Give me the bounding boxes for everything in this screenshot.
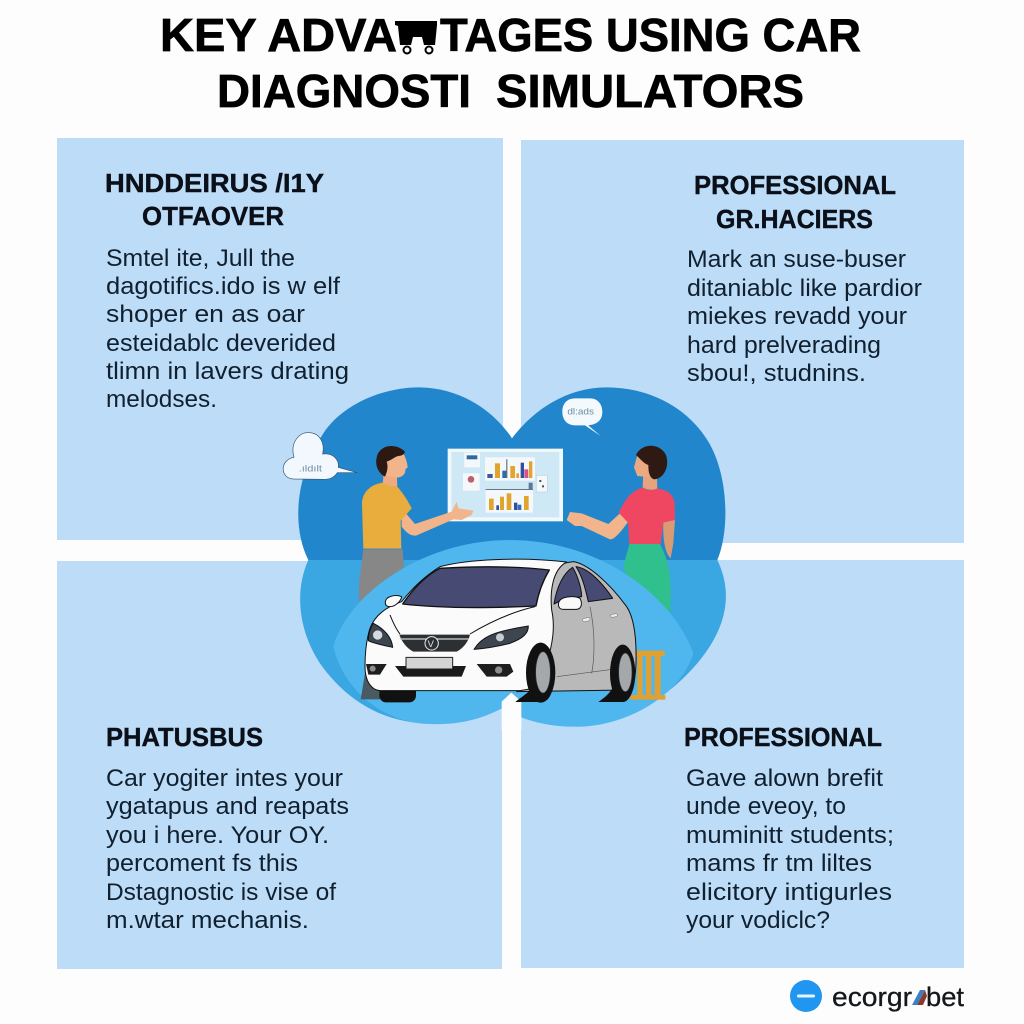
logo: ecorgrobet: ecorgr: [832, 982, 912, 1012]
text block: bottom right: your vodiclc?: [686, 907, 830, 934]
bar chart: lower: [486, 489, 533, 513]
fog lights: [366, 664, 387, 675]
text block: top right: ditaniablc like pardior: [687, 275, 922, 302]
neck: [383, 470, 397, 487]
text block: top left: [106, 245, 349, 413]
white gap: bottom notch: [502, 693, 521, 730]
bar chart: upper: [485, 457, 535, 481]
panel: bottom left: [57, 561, 502, 969]
heading: top left: HNDDEIRUS /I1Y: [105, 168, 324, 198]
legs: [359, 549, 405, 613]
heading: top left: OTFAOVER: [142, 201, 284, 231]
hood lines: [390, 607, 535, 634]
title: DIAGNOSTI: [217, 65, 471, 117]
wheel: rear: [598, 645, 635, 702]
text block: bottom right: [686, 765, 894, 934]
text block: bottom right: mams fr tm liltes: [686, 850, 872, 877]
heading: bottom right: PROFESSIONAL: [684, 722, 882, 752]
blob: lower light blue lobes: [300, 560, 726, 725]
text block: bottom right: elicitory intigurles: [686, 879, 892, 906]
panel: top right: [521, 140, 964, 543]
icon: golden column: [630, 651, 665, 700]
chart board: [448, 449, 563, 521]
text block: bottom right: unde eveoy, to: [686, 793, 846, 820]
legs: [623, 544, 671, 613]
text block: top left: Smtel ite, Jull the: [106, 245, 295, 272]
text block: bottom left: ygatapus and reapats: [106, 793, 349, 820]
text block: top right: [687, 246, 922, 387]
text block: top left: melodses.: [106, 386, 217, 413]
blob: upper dark blue lobes: [298, 387, 725, 560]
text block: top left: dagotifics.ido is w elf: [106, 273, 340, 300]
text block: top right: miekes revadd your: [687, 303, 907, 330]
car: [365, 559, 636, 703]
neck: [643, 470, 657, 490]
back arm: [663, 520, 675, 558]
car body side: [517, 562, 636, 692]
text block: top left: esteidablc deverided: [106, 330, 336, 357]
text block: top left: tlimn in lavers drating: [106, 358, 349, 385]
text block: top right: hard prelverading: [687, 332, 881, 359]
mirrors: [559, 597, 581, 609]
text block: bottom left: percoment fs this: [106, 850, 298, 877]
face: [634, 452, 653, 477]
icon: cart in title: [395, 21, 437, 54]
logo: ecorgrobet: bet: [926, 982, 964, 1012]
icon: front stand: [361, 673, 380, 699]
car body front: [365, 559, 567, 691]
shirt: [619, 487, 675, 544]
icon: striped letter: [912, 990, 927, 1005]
grille: [399, 635, 470, 652]
wheel: front: [515, 643, 555, 703]
hair: [376, 446, 405, 477]
heading: top right: [694, 170, 896, 234]
side windows: [554, 567, 582, 604]
headlights: [368, 623, 393, 647]
arm: [402, 502, 473, 536]
text block: bottom left: Car yogiter intes your: [106, 765, 343, 792]
licence plate: [406, 657, 453, 669]
icon: flag tile: [463, 473, 480, 491]
heading: bottom left: PHATUSBUS: [106, 722, 263, 752]
door line: [557, 607, 620, 677]
heading: top left: [105, 168, 324, 231]
speech bubble: right: [562, 398, 602, 436]
blob: inner light dome: [333, 540, 693, 727]
person: right: [567, 446, 675, 613]
text block: bottom left: [106, 765, 349, 934]
central illustration: [283, 387, 726, 730]
heading: top right: GR.HACIERS: [716, 204, 873, 234]
title: KEY ADVA: [160, 9, 397, 61]
hair: [636, 446, 667, 479]
person: left: [359, 446, 473, 613]
face: [384, 453, 408, 477]
title: TAGES USING CAR: [440, 9, 861, 61]
text block: bottom right: Gave alown brefit: [686, 765, 883, 792]
icon: blue circle: [790, 980, 822, 1012]
panel: bottom right: [521, 560, 964, 968]
speech bubble: right: dl:ads: [567, 406, 594, 416]
icon: small note: [536, 475, 547, 492]
door handles: [582, 617, 590, 622]
logo: ecorgrobet: [790, 980, 964, 1012]
front tyre: [379, 682, 416, 702]
windshield: [403, 567, 549, 608]
heading: top right: PROFESSIONAL: [694, 170, 896, 200]
icon: truck tile: [464, 453, 480, 467]
speech bubble: left cloud: .ıldılt: [299, 463, 322, 473]
text block: top right: sbou!, studnins.: [687, 360, 866, 387]
title: [160, 9, 861, 117]
shirt: [362, 483, 412, 549]
speech bubble: left cloud: [283, 433, 357, 479]
text block: top right: Mark an suse-buser: [687, 246, 906, 273]
lower bumper intake: [395, 666, 466, 677]
panel: top left: [57, 138, 503, 540]
text block: bottom left: Dstagnostic is vise of: [106, 879, 336, 906]
text block: bottom left: you i here. Your OY.: [106, 822, 329, 849]
text block: top left: shoper en as oar: [106, 301, 305, 328]
text block: bottom right: muminitt students;: [686, 822, 894, 849]
car: V: [428, 639, 435, 649]
text block: bottom left: m.wtar mechanis.: [106, 907, 309, 934]
title: SIMULATORS: [496, 65, 804, 117]
front arm: [567, 512, 628, 539]
